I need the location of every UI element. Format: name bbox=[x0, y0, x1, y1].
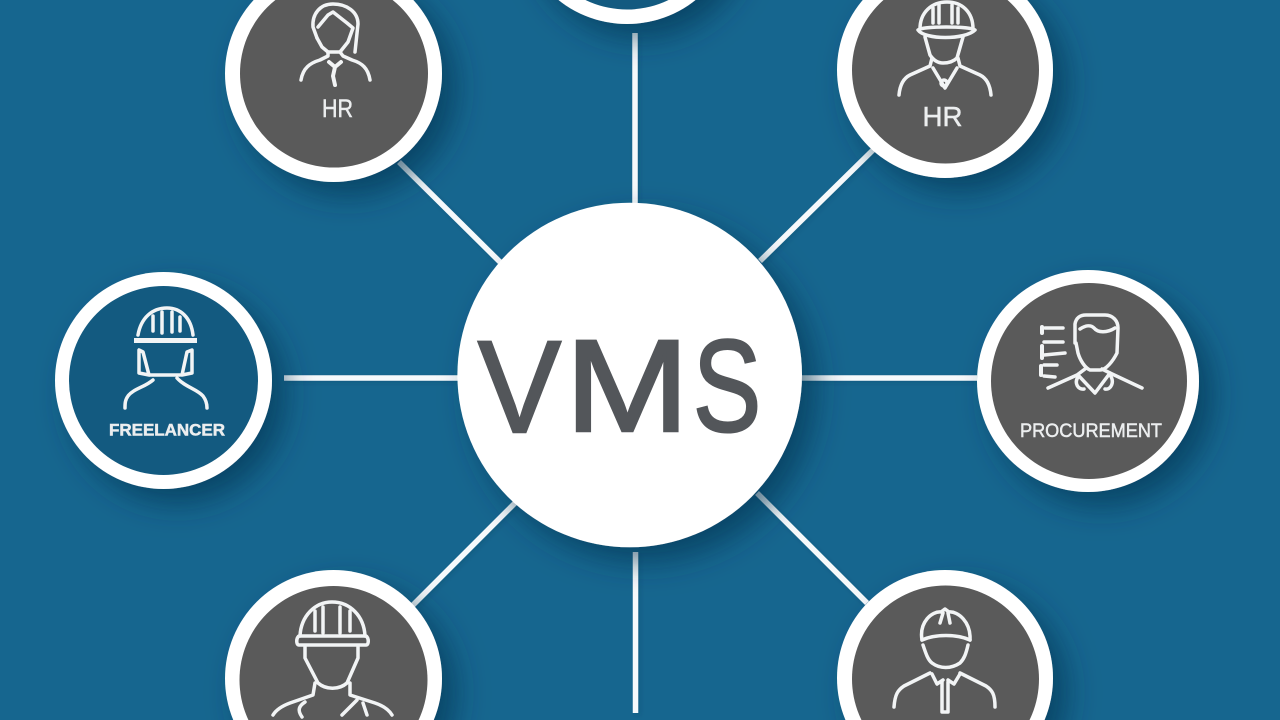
node: bottom left worker bbox=[225, 570, 442, 720]
connector: top bbox=[632, 33, 638, 204]
label: HR: HR bbox=[322, 95, 353, 123]
node: top left HR bbox=[225, 0, 442, 182]
icon: procurement person with list bbox=[1041, 315, 1142, 393]
icon: woman with tie bbox=[301, 4, 370, 85]
node: central VMS hub bbox=[457, 203, 802, 547]
icon: worker with hard hat bbox=[273, 602, 392, 717]
label: Procurement: PROCUREMENT bbox=[1020, 421, 1162, 442]
title: VMS bbox=[478, 313, 761, 461]
title: VMS: S bbox=[693, 313, 761, 459]
connector: bottom right bbox=[757, 493, 867, 603]
node: top right HR bbox=[837, 0, 1053, 178]
connector: top right bbox=[760, 150, 873, 261]
title: VMS: M bbox=[565, 313, 689, 459]
connector: bottom bbox=[633, 552, 638, 713]
node: right Procurement bbox=[977, 270, 1199, 492]
icon: freelancer with hard hat bbox=[125, 308, 207, 408]
connector: left bbox=[284, 375, 458, 381]
connector: top left bbox=[399, 162, 500, 262]
icon: worker with hard hat bbox=[899, 2, 991, 95]
label: Freelancer: FREELANCER bbox=[109, 420, 225, 440]
label: HR: HR bbox=[922, 101, 962, 132]
icon: worker with hard hat and placket bbox=[894, 609, 995, 712]
node: left Freelancer bbox=[55, 272, 272, 489]
node: top (cropped) bbox=[517, 0, 737, 24]
connector lines bbox=[284, 33, 977, 713]
connector: bottom left bbox=[413, 503, 515, 605]
node: bottom right worker bbox=[837, 570, 1053, 720]
title: VMS: V bbox=[478, 314, 561, 461]
connector: right bbox=[802, 375, 977, 381]
